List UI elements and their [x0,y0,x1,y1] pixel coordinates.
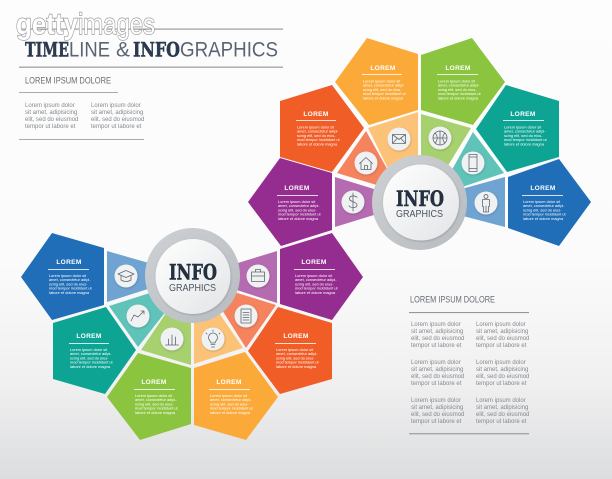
lower wheel [21,228,363,440]
text block: bottom right: sit amet, adipisicing [476,405,528,411]
panel: amber: Lorem ipsum dolor sit [210,393,248,398]
panel: orange [280,85,364,172]
text block: top left: sit amet, adipisicing [25,110,77,116]
text block: bottom right: tempor ut labore et [476,381,527,387]
icon: basketball [428,126,452,150]
panel: green: scing elit, sed do eius- [135,401,174,406]
text block: bottom right: Lorem ipsum dolor [476,360,526,366]
text block: top left: elit, sed do eiusmod [91,117,144,123]
panel: amber: mod tempor incididunt ut [210,406,254,411]
text block: top left: tempor ut labore et [91,124,142,130]
inner segments [107,251,277,365]
panel: teal: Lorem ipsum dolor sit [70,347,108,352]
text block: bottom right: elit, sed do eiusmod [411,374,464,380]
panel: purple: LOREM [301,259,327,266]
panel: green [107,353,191,440]
panel: teal: Lorem ipsum dolor sit [504,124,542,130]
icon: document [234,304,258,328]
panel: green: LOREM [141,379,167,386]
panel: purple: mod tempor incididunt ut [295,286,339,291]
text block: bottom right: Lorem ipsum dolor [476,322,526,328]
panel: amber: Lorem ipsum dolor sit [363,78,401,84]
text block: bottom right: elit, sed do eiusmod [476,374,529,380]
panel: orange: scing elit, sed do eius- [276,355,315,360]
panel: purple: scing elit, sed do eius- [278,207,317,212]
panel: amber: LOREM [216,379,242,386]
text block: top left [19,76,144,140]
text block: top left: sit amet, adipisicing [91,110,143,116]
text block: bottom right: sit amet, adipisicing [411,405,463,411]
panel: amber: mod tempor incididunt ut [363,91,407,96]
panel: teal [476,85,559,172]
panel: amber [194,352,278,440]
panel: orange: amet, consectetur adipi- [276,351,318,356]
text block: bottom right: Lorem ipsum dolor [411,398,461,404]
panel: teal: amet, consectetur adipi- [504,129,546,134]
panel: purple: Lorem ipsum dolor sit [295,273,333,278]
panel: purple: amet, consectetur adipi- [278,203,320,208]
panel: orange: Lorem ipsum dolor sit [276,347,314,352]
panel: amber: LOREM [370,65,396,72]
panel: blue: Lorem ipsum dolor sit [523,199,561,204]
panel: blue: labore et dolore magna [523,216,564,221]
panel: orange: labore et dolore magna [297,141,338,146]
icon: bar chart [160,328,184,350]
panel: purple [280,233,363,320]
panel: blue: labore et dolore magna [49,290,90,295]
panel: purple: Lorem ipsum dolor sit [278,199,316,204]
panel: blue: scing elit, sed do eius- [49,281,88,286]
text block: bottom right: elit, sed do eiusmod [476,412,529,418]
icon: trend line [126,304,150,328]
icon: person [474,192,498,214]
text block: bottom right: tempor ut labore et [411,343,462,349]
panel: amber: amet, consectetur adipi- [363,83,405,88]
panel: green: mod tempor incididunt ut [438,91,482,96]
text block: bottom right: elit, sed do eiusmod [411,412,464,418]
panel: blue [508,159,591,246]
hub: info graphics: INFO [169,260,217,284]
upper wheel [248,38,591,250]
text block: bottom right: elit, sed do eiusmod [411,336,464,342]
text block: bottom right: sit amet, adipisicing [476,367,528,373]
text block: top left: Lorem ipsum dolor [25,103,75,109]
panel: teal: amet, consectetur adipi- [70,351,112,356]
watermark: images [78,8,155,41]
icon: briefcase [246,264,270,288]
panel: teal: mod tempor incididunt ut [70,360,114,365]
panel: teal: labore et dolore magna [504,141,545,146]
icon: graduation cap [114,264,138,288]
panel: green: amet, consectetur adipi- [438,83,480,88]
panel: amber: scing elit, sed do eius- [363,87,402,92]
text block: bottom right: Lorem ipsum dolor [411,322,461,328]
panel: teal: mod tempor incididunt ut [504,137,548,142]
panel: purple: mod tempor incididunt ut [278,212,322,217]
text block: top left: LOREM IPSUM DOLORE [25,76,111,86]
text block: bottom right: tempor ut labore et [411,419,462,425]
title: GRAPHICS [180,38,278,62]
text block: top left: tempor ut labore et [25,124,76,130]
panel: amber [335,38,418,125]
inner segments [335,112,505,227]
title: INFO [133,38,180,62]
title: LINE [69,38,110,62]
hub: info graphics: GRAPHICS [169,282,216,294]
panel: green: amet, consectetur adipi- [135,397,177,402]
panel: blue: Lorem ipsum dolor sit [49,273,87,278]
panel: blue: LOREM [56,259,82,266]
panel: green: Lorem ipsum dolor sit [135,393,173,398]
panel: orange [248,307,332,394]
panel: orange: mod tempor incididunt ut [297,137,341,142]
text block: bottom right: Lorem ipsum dolor [411,360,461,366]
icon: home [354,152,378,174]
text block: bottom right: LOREM IPSUM DOLORE [410,294,495,306]
panel: purple [248,158,332,246]
hub: info graphics [145,228,240,323]
panel: blue [21,233,104,320]
panel: blue: LOREM [530,185,556,192]
panel: purple: labore et dolore magna [295,290,336,295]
panel: green: labore et dolore magna [438,95,479,100]
text block: bottom right: sit amet, adipisicing [411,367,463,373]
panel: green: scing elit, sed do eius- [438,87,477,92]
panel: amber: labore et dolore magna [210,410,251,415]
panel: orange: mod tempor incididunt ut [276,360,320,365]
panel: orange: LOREM [283,333,309,340]
panel: amber: amet, consectetur adipi- [210,397,252,402]
text block: bottom right: sit amet, adipisicing [411,329,463,335]
title [25,38,278,62]
text block: bottom right: tempor ut labore et [476,419,527,425]
panel: teal: LOREM [510,111,536,118]
panel: blue: mod tempor incididunt ut [523,212,567,217]
icon: phone [462,152,484,174]
icon: light bulb [202,328,224,350]
header rule bottom [19,66,283,68]
hub: info graphics: GRAPHICS [396,208,443,220]
panel: purple: LOREM [284,185,310,192]
panel: orange: LOREM [303,111,329,118]
panel: blue: mod tempor incididunt ut [49,286,93,291]
panel: green: mod tempor incididunt ut [135,406,179,411]
text block: bottom right: Lorem ipsum dolor [476,398,526,404]
panel: teal: scing elit, sed do eius- [70,355,109,360]
panel: teal: labore et dolore magna [70,364,111,369]
panel: green: Lorem ipsum dolor sit [438,78,476,84]
text block: bottom right: tempor ut labore et [411,381,462,387]
panel: green [421,38,505,125]
panel: orange: Lorem ipsum dolor sit [297,124,335,130]
panel: amber: labore et dolore magna [363,95,404,100]
panel: blue: amet, consectetur adipi- [49,277,91,282]
panel: green: labore et dolore magna [135,410,176,415]
panel: orange: scing elit, sed do eius- [297,133,336,138]
header rule top [19,28,283,30]
hub: info graphics [372,155,467,250]
panel: teal: scing elit, sed do eius- [504,133,543,138]
panel: blue: scing elit, sed do eius- [523,207,562,212]
text block: bottom right [409,294,529,434]
panel: teal: LOREM [76,333,102,340]
panel: orange: labore et dolore magna [276,364,317,369]
title: & [116,38,130,62]
icon: dollar [342,190,364,214]
panel: purple: scing elit, sed do eius- [295,281,334,286]
panel: purple: amet, consectetur adipi- [295,277,337,282]
panel: orange: amet, consectetur adipi- [297,129,339,134]
title: TIME [25,38,69,62]
watermark: getty [16,8,78,41]
panel: blue: amet, consectetur adipi- [523,203,565,208]
icon: envelope [388,128,410,150]
hub: info graphics: INFO [396,186,444,211]
text block: top left: elit, sed do eiusmod [25,117,78,123]
text block: bottom right: sit amet, adipisicing [476,329,528,335]
panel: green: LOREM [445,65,471,72]
panel: teal [53,307,136,394]
text block: top left: Lorem ipsum dolor [91,103,141,109]
text block: bottom right: tempor ut labore et [476,343,527,349]
watermark [16,8,155,41]
text block: bottom right: elit, sed do eiusmod [476,336,529,342]
panel: purple: labore et dolore magna [278,216,319,221]
panel: amber: scing elit, sed do eius- [210,401,249,406]
